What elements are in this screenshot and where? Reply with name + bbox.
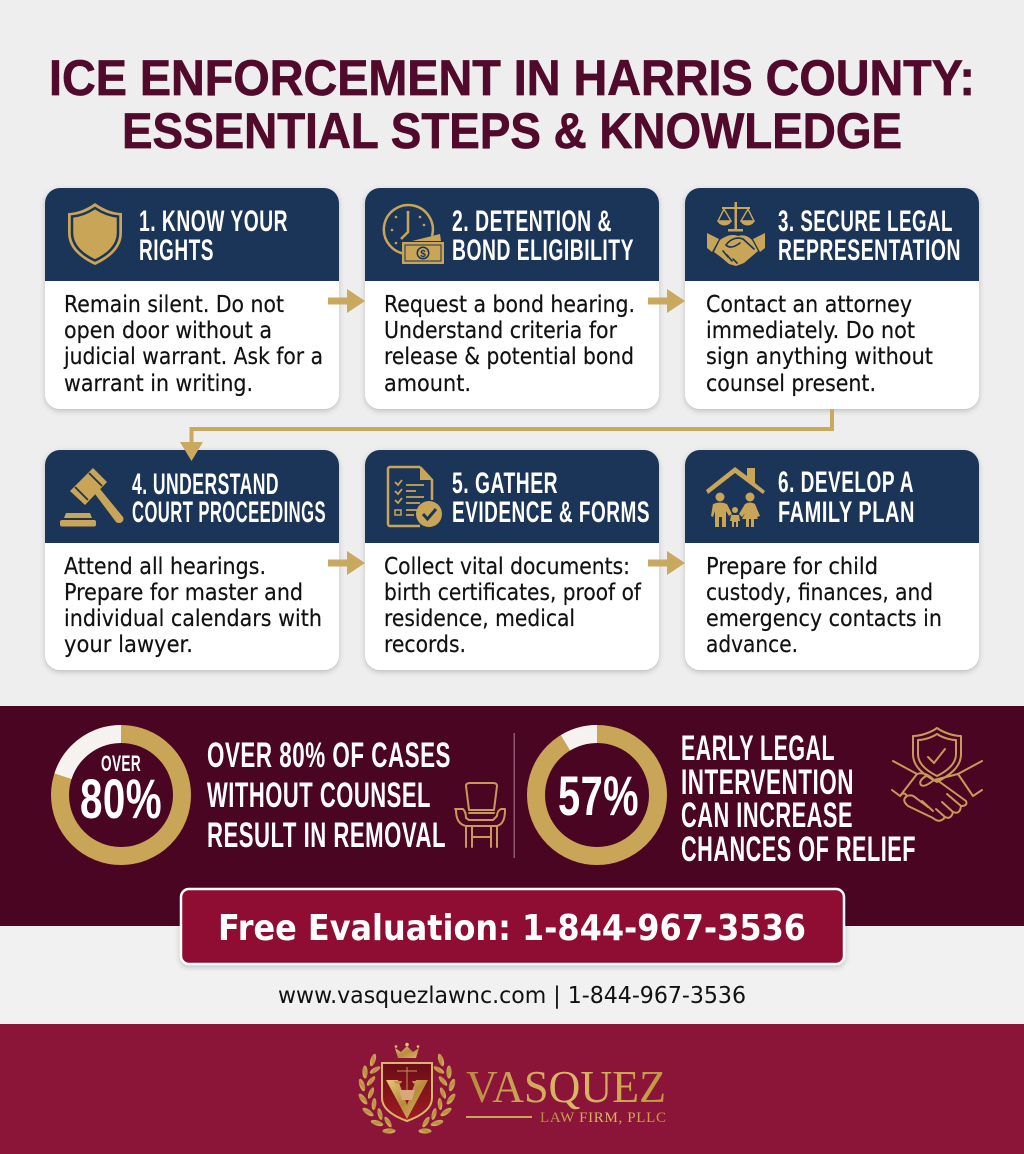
step 5 heading: EVIDENCE & FORMS bbox=[452, 496, 650, 529]
statistic text: removal: RESULT IN REMOVAL bbox=[207, 816, 446, 855]
panel: step 3 secure legal representation bbox=[685, 188, 979, 409]
step 2 text: amount. bbox=[384, 371, 471, 397]
step 3 heading bbox=[778, 205, 961, 267]
step 4 heading: 4. UNDERSTAND bbox=[132, 468, 279, 501]
step 1 text: Remain silent. Do not bbox=[64, 292, 284, 318]
step 4 text bbox=[64, 554, 322, 658]
step 6 heading: FAMILY PLAN bbox=[778, 496, 915, 529]
step 6 text: emergency contacts in bbox=[706, 606, 942, 632]
step 5 text: birth certificates, proof of bbox=[384, 580, 642, 606]
icon: clock and money bbox=[384, 205, 444, 264]
icon: clock and money: $ bbox=[420, 249, 426, 260]
statistic text: removal: WITHOUT COUNSEL bbox=[207, 776, 431, 815]
step 5 text: Collect vital documents: bbox=[384, 554, 630, 580]
step 3 text: Contact an attorney bbox=[706, 292, 912, 318]
arrow: step 3 to 4 connector bbox=[180, 409, 832, 461]
logo: wordmark: VASQUEZ bbox=[466, 1061, 666, 1112]
statistic text: early intervention: CAN INCREASE bbox=[681, 796, 853, 835]
step 6 text bbox=[706, 554, 942, 658]
step 1 heading: RIGHTS bbox=[139, 234, 214, 267]
step 1 heading bbox=[139, 205, 288, 267]
step 5 text bbox=[384, 554, 642, 658]
panel: step 2 detention and bond eligibility bbox=[365, 188, 659, 409]
arrow: step 2 to 3 bbox=[648, 289, 685, 313]
step 5 text: residence, medical bbox=[384, 606, 575, 632]
step 6 heading: 6. DEVELOP A bbox=[778, 466, 914, 499]
call to action button bbox=[181, 889, 844, 964]
step 1 heading: 1. KNOW YOUR bbox=[139, 205, 288, 238]
icon: gavel bbox=[60, 468, 123, 526]
panel: footer bbox=[0, 1024, 1024, 1154]
icon: checklist document bbox=[388, 467, 442, 527]
step 2 text bbox=[384, 292, 635, 397]
step 4 heading: COURT PROCEEDINGS bbox=[132, 496, 326, 529]
panel: statistics band bbox=[0, 706, 1024, 926]
icon: chair bbox=[455, 783, 505, 847]
logo: wordmark: LAW FIRM, PLLC bbox=[540, 1110, 666, 1126]
step 2 heading: BOND ELIGIBILITY bbox=[452, 234, 634, 267]
step 2 heading bbox=[452, 205, 634, 267]
logo: crest bbox=[357, 1043, 457, 1134]
title bbox=[49, 50, 975, 159]
step 5 heading: 5. GATHER bbox=[452, 467, 558, 500]
step 3 text: immediately. Do not bbox=[706, 318, 915, 344]
step 4 heading bbox=[132, 468, 326, 529]
arrow: step 4 to 5 bbox=[328, 551, 365, 575]
contact line: www.vasquezlawnc.com | 1-844-967-3536 bbox=[278, 981, 746, 1009]
arrow: step 1 to 2 bbox=[328, 289, 365, 313]
title: ICE ENFORCEMENT IN HARRIS COUNTY: bbox=[49, 50, 975, 106]
statistic text: removal: OVER 80% OF CASES bbox=[207, 736, 451, 775]
step 4 text: your lawyer. bbox=[64, 632, 193, 658]
panel: lower background bbox=[0, 926, 1024, 1024]
arrow: step 5 to 6 bbox=[648, 551, 685, 575]
statistic text: early intervention bbox=[681, 729, 916, 869]
step 1 text: judicial warrant. Ask for a bbox=[63, 344, 323, 370]
panel: step 5 gather evidence and forms bbox=[365, 450, 659, 670]
step 3 text: sign anything without bbox=[706, 344, 933, 370]
panel: step 1 know your rights bbox=[45, 188, 339, 409]
step 6 text: advance. bbox=[706, 632, 798, 658]
logo: shield bbox=[382, 1063, 432, 1121]
icon: house and family bbox=[706, 467, 765, 527]
step 5 heading bbox=[452, 467, 650, 529]
statistic text: early intervention: INTERVENTION bbox=[681, 763, 854, 802]
call to action button: Free Evaluation: 1-844-967-3536 bbox=[218, 908, 806, 949]
step 3 text bbox=[706, 292, 933, 397]
logo: right laurel bbox=[418, 1053, 457, 1134]
step 6 text: Prepare for child bbox=[706, 554, 878, 580]
step 1 text: open door without a bbox=[64, 318, 272, 344]
icon: scales and handshake bbox=[707, 202, 765, 266]
icon: shield bbox=[68, 203, 122, 265]
step 4 text: Attend all hearings. bbox=[64, 554, 266, 580]
step 2 text: Request a bond hearing. bbox=[384, 292, 635, 318]
donut chart: 57 percent bbox=[536, 734, 658, 856]
step 1 text: warrant in writing. bbox=[64, 371, 253, 397]
step 2 text: Understand criteria for bbox=[384, 318, 617, 344]
divider bbox=[514, 733, 515, 858]
statistic text: early intervention: EARLY LEGAL bbox=[681, 729, 835, 768]
step 1 text bbox=[63, 292, 323, 397]
donut chart: over 80 percent: OVER bbox=[101, 751, 141, 776]
icon: shield with handshake bbox=[892, 728, 982, 821]
title: ESSENTIAL STEPS & KNOWLEDGE bbox=[122, 103, 902, 159]
statistic text: removal bbox=[207, 736, 451, 855]
logo: left laurel bbox=[357, 1053, 396, 1134]
donut chart: 57 percent: 57% bbox=[558, 764, 639, 827]
donut chart: over 80 percent bbox=[60, 734, 182, 856]
donut chart: over 80 percent: 80% bbox=[80, 767, 162, 830]
step 6 heading bbox=[778, 466, 915, 529]
panel: step 4 understand court proceedings bbox=[45, 450, 339, 670]
step 5 text: records. bbox=[384, 632, 466, 658]
step 3 text: counsel present. bbox=[706, 371, 876, 397]
step 2 heading: 2. DETENTION & bbox=[452, 205, 612, 238]
step 2 text: release & potential bond bbox=[384, 344, 634, 370]
step 4 text: Prepare for master and bbox=[64, 580, 303, 606]
panel: step 6 develop a family plan bbox=[685, 450, 979, 670]
step 4 text: individual calendars with bbox=[64, 606, 322, 632]
step 6 text: custody, finances, and bbox=[706, 580, 933, 606]
logo: crown bbox=[395, 1043, 419, 1058]
